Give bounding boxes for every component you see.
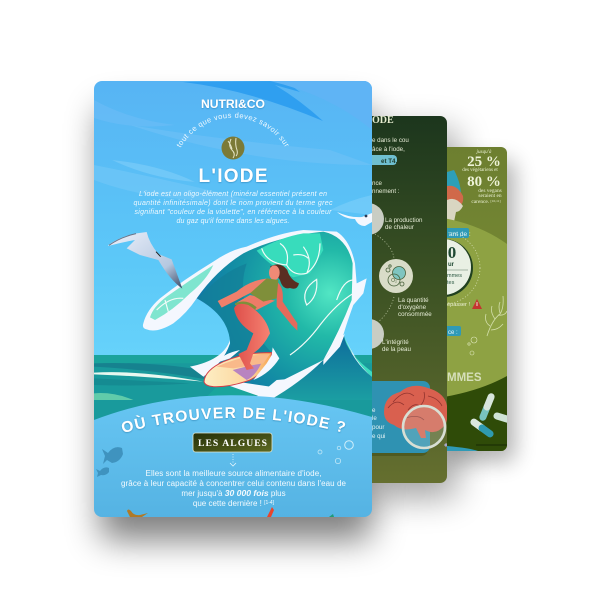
title: L'IODE bbox=[198, 166, 268, 187]
text: warning: épasser ! bbox=[447, 302, 470, 308]
button: les algues: LES ALGUES bbox=[198, 438, 267, 449]
wave foam outer bbox=[143, 230, 374, 400]
icon: fish bbox=[96, 447, 123, 477]
background: streaks bbox=[94, 81, 372, 215]
gauge circle: ur bbox=[448, 262, 455, 268]
seaweed bottom accents bbox=[127, 507, 334, 517]
text: introduction: signifiant "couleur de la violette", en référence à la couleur bbox=[134, 209, 332, 216]
text: algae description: que cette dernière ! bbox=[193, 499, 262, 508]
surfboard bbox=[204, 353, 272, 387]
icon: oxygen circle: O₂ bbox=[391, 278, 397, 284]
seagull: left bbox=[108, 232, 182, 289]
tag: blue label 2: ce : bbox=[448, 330, 458, 336]
text: oxygen: consommée bbox=[398, 311, 432, 318]
icon: brain with magnifier bbox=[384, 386, 448, 448]
arc: lighter green area bbox=[447, 218, 507, 451]
foam around board bbox=[215, 347, 279, 380]
illustration: figure at left edge bbox=[447, 170, 463, 222]
surfer bbox=[218, 264, 299, 370]
arrow: dotted down bbox=[230, 454, 236, 466]
tag: blue label bbox=[447, 228, 470, 238]
text: intro: âce à l'iode, bbox=[372, 146, 405, 153]
text: statistics: 80 % bbox=[467, 174, 501, 190]
text: statistics: jusqu'à bbox=[476, 149, 492, 155]
text: introduction: quantité infinitésimale) dont le nom provient du terme grec bbox=[134, 200, 333, 207]
text: oxygen: d'oxygène bbox=[398, 304, 427, 311]
foam lace bbox=[157, 243, 353, 355]
text: algae description: Elles sont la meilleure source alimentaire d'iode, bbox=[146, 469, 322, 478]
text: algae description: mer jusqu'à 30 000 fois plus bbox=[181, 488, 286, 498]
seagull: right bbox=[337, 212, 372, 226]
tag: blue label: ant de : bbox=[449, 231, 471, 238]
panel: third card, back bbox=[447, 147, 507, 451]
text: statistics: carence. bbox=[471, 199, 489, 205]
panel: second card, middle bbox=[372, 116, 447, 483]
panel: main front card: OÙ TROUVER DE L'IODE ? bbox=[121, 407, 346, 434]
text: introduction: L'iode est un oligo-élément (minéral essentiel présent en bbox=[139, 191, 327, 198]
text: statistics: seraient en bbox=[478, 193, 502, 199]
panel: main front card bbox=[94, 81, 372, 517]
text: intro: nce bbox=[372, 180, 383, 187]
text: algae description: [1-4] bbox=[264, 500, 275, 506]
background: sky bbox=[94, 81, 372, 355]
text: introduction: du gaz qu'il forme dans les algues. bbox=[176, 218, 290, 225]
shadow: behind cards bbox=[100, 108, 515, 540]
text: statistics: 25 % bbox=[467, 154, 501, 170]
text: statistics: [10,11] bbox=[491, 199, 501, 204]
panel: bottom section bbox=[94, 395, 372, 517]
icon: algae outline bbox=[486, 296, 507, 336]
icon: seaweed emblem bbox=[222, 136, 244, 160]
heading fragment: ODE bbox=[372, 115, 394, 126]
icon: heat circle bbox=[372, 204, 384, 234]
wave barrel bbox=[197, 232, 353, 387]
gauge circle: 0 bbox=[448, 243, 456, 262]
text: oxygen bbox=[398, 298, 432, 316]
panel: blue brain box: e qui bbox=[372, 433, 385, 440]
panel: blue brain box: e bbox=[372, 407, 376, 414]
heading: arc title bbox=[120, 418, 348, 434]
text: algae description: grâce à leur capacité à concentrer celui contenu dans l'eau de bbox=[121, 479, 347, 488]
logo: NUTRI&CO bbox=[201, 99, 265, 111]
tag: T3 et T4: et T4. bbox=[381, 158, 397, 165]
bright crest region bbox=[257, 233, 323, 277]
bubbles bbox=[318, 441, 353, 464]
strip at bottom bbox=[447, 446, 478, 451]
text: algae description bbox=[121, 469, 347, 508]
icon: skin circle bbox=[372, 319, 384, 349]
gauge circle: mmes bbox=[447, 273, 462, 279]
text: oxygen: La quantité bbox=[398, 297, 429, 304]
text: statistics: des végétariens et bbox=[462, 168, 498, 173]
lower wave bbox=[270, 336, 374, 400]
text: intro bbox=[372, 137, 409, 195]
text: skin bbox=[382, 339, 411, 353]
dark green area bbox=[447, 376, 507, 451]
text: statistics: des vegans bbox=[478, 188, 502, 194]
text: heat: La production bbox=[385, 217, 423, 224]
heading fragment: MMES bbox=[447, 372, 482, 384]
panel: main front card: tout ce que vous devez savoir sur bbox=[176, 112, 289, 148]
gauge circle bbox=[447, 232, 480, 304]
illustration: surfing wave bbox=[94, 230, 374, 435]
sea bbox=[94, 355, 372, 420]
text: heat bbox=[385, 218, 422, 229]
icon: oxygen circle bbox=[379, 259, 413, 293]
barrel darker interior bbox=[198, 263, 277, 370]
panel: blue brain box: pour bbox=[372, 424, 384, 431]
text: skin: L'intégrité bbox=[382, 339, 409, 346]
text: heat: de chaleur bbox=[385, 224, 414, 231]
text: skin: de la peau bbox=[382, 346, 411, 353]
text: statistics bbox=[462, 149, 502, 205]
gauge circle: tes bbox=[447, 280, 455, 286]
tag: blue label 2 bbox=[447, 326, 461, 336]
bubbles bbox=[468, 337, 477, 355]
icons: capsules bbox=[474, 397, 510, 434]
arc subtitle bbox=[176, 118, 290, 157]
panel: blue brain box: le bbox=[372, 415, 377, 422]
wave lip bbox=[150, 265, 213, 320]
button: les algues bbox=[193, 433, 272, 452]
text: intro: nnement : bbox=[372, 188, 400, 195]
text: intro: e dans le cou bbox=[372, 137, 409, 144]
tag: T3 et T4 bbox=[372, 155, 397, 165]
panel: blue brain box bbox=[372, 381, 430, 456]
connector: dotted path bbox=[375, 234, 394, 322]
text: warning bbox=[447, 299, 482, 309]
text: introduction bbox=[134, 191, 333, 225]
